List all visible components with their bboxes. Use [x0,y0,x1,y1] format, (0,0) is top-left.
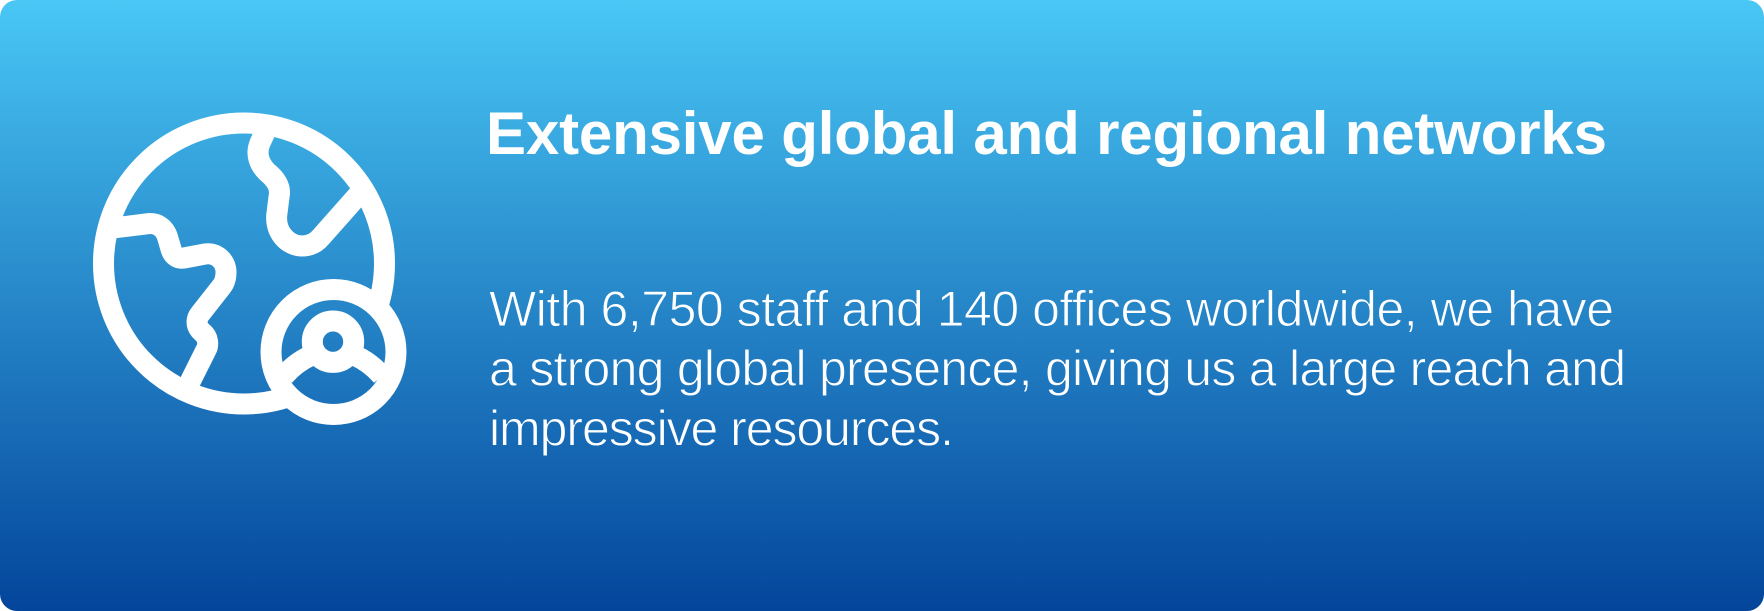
body text [489,281,1626,456]
icon part: globe and continents [104,123,384,404]
icon part: person badge [271,290,396,414]
body text: impressive resources. [489,400,954,456]
heading: Extensive global and regional networks [486,100,1607,167]
body text: a strong global presence, giving us a large reach and [489,340,1626,396]
icon: globe with person [104,123,396,414]
body text: With 6,750 staff and 140 offices worldwide, we have [489,281,1614,337]
